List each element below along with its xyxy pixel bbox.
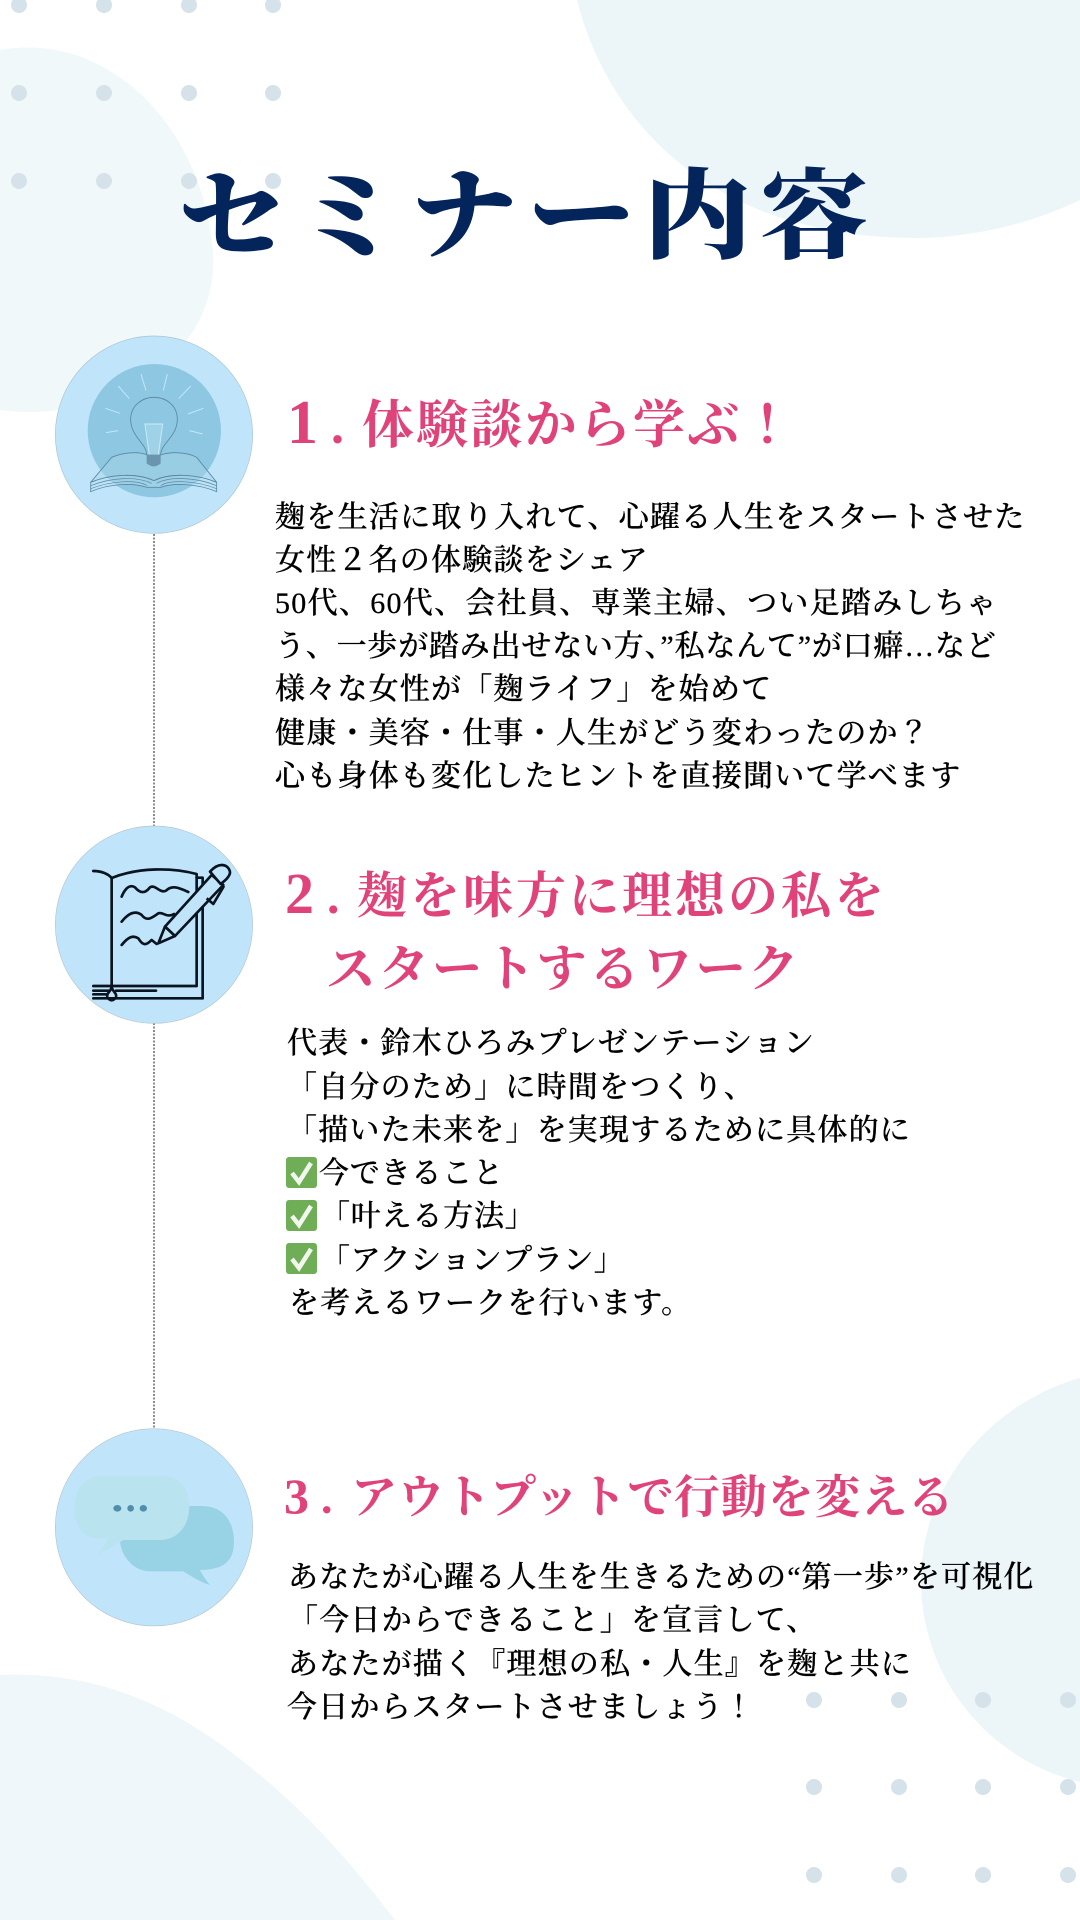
dot grid: bottom right bbox=[806, 1692, 1076, 1883]
body text 2: 「描いた未来を」を実現するために具体的に bbox=[287, 1114, 911, 1147]
body text 1: 女性２名の体験談をシェア bbox=[275, 544, 649, 577]
body text 2: 代表・鈴木ひろみプレゼンテーション bbox=[287, 1027, 815, 1060]
timeline connector: bottom bbox=[153, 1023, 155, 1429]
dot grid: top left bbox=[11, 0, 281, 189]
heading 1: . bbox=[331, 398, 344, 455]
heading 3: アウトプットで行動を変える bbox=[351, 1472, 955, 1523]
heading 1: 体験談から学ぶ！ bbox=[362, 398, 796, 455]
heading 3: 3 bbox=[284, 1468, 309, 1524]
body text 2: 「アクションプラン」 bbox=[320, 1244, 624, 1277]
body text 1: 様々な女性が「麹ライフ」を始めて bbox=[275, 673, 772, 706]
body text 1: 麹を生活に取り入れて、心躍る人生をスタートさせた bbox=[275, 501, 1026, 534]
heading 2: スタートするワーク bbox=[326, 941, 802, 997]
body text 1: 50代、60代、会社員、専業主婦、つい足踏みしちゃ bbox=[275, 587, 998, 620]
background blob: top left bbox=[0, 47, 213, 412]
body text 1: う、一歩が踏み出せない方、”私なんて”が口癖…など bbox=[275, 630, 997, 663]
body text 2: 今できること bbox=[319, 1157, 504, 1190]
checkbox icons bbox=[286, 1157, 317, 1274]
heading 2: 麹を味方に理想の私を bbox=[357, 868, 887, 924]
heading 1: 1 bbox=[287, 389, 318, 457]
body text 2: 「自分のため」に時間をつくり、 bbox=[287, 1071, 755, 1104]
title: セミナー内容 bbox=[178, 163, 876, 272]
icon: speech bubbles bbox=[55, 1429, 253, 1626]
icon: light bulb over book bbox=[55, 336, 253, 533]
body text 3 bbox=[287, 1561, 1035, 1724]
body text 2 bbox=[287, 1027, 911, 1320]
heading 3: . bbox=[321, 1472, 332, 1523]
body text 1: 心も身体も変化したヒントを直接聞いて学べます bbox=[275, 760, 961, 793]
body text 3: あなたが心躍る人生を生きるための“第一歩”を可視化 bbox=[288, 1561, 1035, 1594]
timeline connector: top bbox=[153, 534, 155, 826]
background blob: bottom right bbox=[921, 1378, 1080, 1782]
heading 2: 2 bbox=[285, 861, 314, 926]
body text 1 bbox=[275, 501, 1026, 793]
body text 3: 「今日からできること」を宣言して、 bbox=[288, 1604, 818, 1637]
background blob: bottom left bbox=[0, 1675, 395, 1920]
body text 1: 健康・美容・仕事・人生がどう変わったのか？ bbox=[275, 717, 930, 750]
body text 2: を考えるワークを行います。 bbox=[289, 1287, 692, 1320]
body text 3: あなたが描く『理想の私・人生』を麹と共に bbox=[288, 1648, 912, 1681]
background blob: top right bbox=[577, 0, 1080, 238]
heading 2: . bbox=[327, 868, 340, 924]
heading 2 bbox=[285, 861, 887, 997]
body text 3: 今日からスタートさせましょう！ bbox=[287, 1691, 755, 1724]
body text 2: 「叶える方法」 bbox=[320, 1200, 536, 1233]
icon: notebook and pen bbox=[55, 826, 253, 1023]
